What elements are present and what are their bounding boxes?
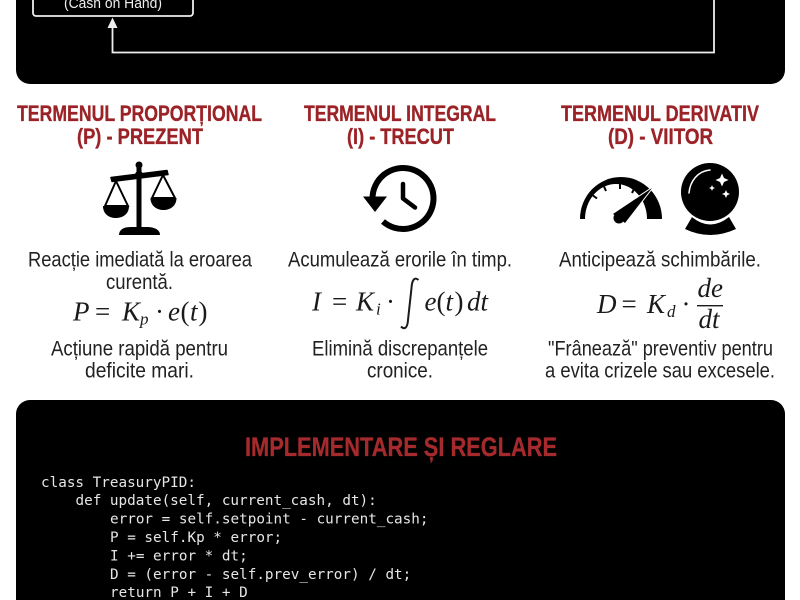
formula: integral: dt [467,286,490,316]
heading: derivative term: (D) - VIITOR [608,124,713,149]
heading: proportional term: TERMENUL PROPORȚIONAL [17,101,262,126]
formula: proportional: p [139,310,148,328]
code block: TreasuryPID: class TreasuryPID: [41,475,196,491]
formula: integral: t [446,286,454,316]
text: proportional effect: Acțiune rapidă pentru [51,338,228,360]
formula: derivative: · [682,289,690,319]
icon: crystal ball [679,161,741,235]
formula: proportional: ) [198,296,208,326]
text: integral description: Acumulează erorile în timp. [288,248,512,272]
heading: derivative term [561,101,759,149]
text: proportional description: Reacție imediată la eroarea [28,248,252,272]
text: derivative description: Anticipează schimbările. [559,248,761,272]
text: proportional description: curentă. [106,271,173,294]
arrow: feedback line [108,0,714,52]
formula: proportional [72,296,208,328]
formula: integral: · [386,286,395,316]
formula: derivative: D [596,289,617,319]
icon: speedometer gauge [580,177,662,224]
code block: TreasuryPID: D = (error - self.prev_error) / dt; [110,567,411,583]
formula: proportional: t [190,296,199,326]
text: integral effect: cronice. [367,360,433,382]
formula: proportional: · [155,296,164,326]
formula: proportional: = [95,296,110,326]
text: derivative effect: a evita crizele sau excesele. [545,360,775,382]
heading: implementation: IMPLEMENTARE ȘI REGLARE [245,432,557,462]
heading: integral term [304,101,496,149]
formula: proportional: ( [180,296,190,326]
code block: TreasuryPID: error = self.setpoint - current_cash; [110,512,428,528]
formula: derivative: K [646,289,667,319]
heading: integral term: (I) - TRECUT [347,124,454,149]
code block: TreasuryPID: def update(self, current_cash, dt): [76,493,377,509]
text: integral effect: Elimină discrepanțele [312,338,488,360]
formula: integral: K [355,286,376,316]
text: integral effect [312,338,488,382]
formula: derivative: d [667,302,676,321]
formula: proportional: e [168,296,180,326]
code block: TreasuryPID [41,475,428,600]
panel: control loop diagram [16,0,785,84]
box: cash on hand [33,0,193,16]
formula: integral: ) [454,286,464,316]
icon: history clock [363,168,433,229]
formula: derivative: de [698,273,723,303]
formula: derivative [596,273,723,334]
code block: TreasuryPID: I += error * dt; [110,548,248,564]
formula: integral: e [424,286,436,316]
text: derivative effect [545,338,775,382]
code block: TreasuryPID: P = self.Kp * error; [110,530,282,546]
formula: proportional: P [72,296,90,326]
formula: integral: i [376,300,381,318]
heading: proportional term [17,101,262,149]
panel: implementation and tuning [16,400,785,600]
heading: integral term: TERMENUL INTEGRAL [304,101,496,126]
formula: integral: ( [436,286,446,316]
formula: integral: I [311,286,323,316]
formula: integral [311,279,490,328]
text: proportional description [28,248,252,294]
formula: integral: = [332,286,347,316]
formula: derivative: dt [698,304,721,334]
formula: derivative: = [622,289,637,319]
text: proportional effect [51,338,228,382]
icon: balance scale [103,162,176,235]
heading: proportional term: (P) - PREZENT [77,124,203,149]
formula: proportional: K [121,296,142,326]
text: proportional effect: deficite mari. [85,360,194,382]
